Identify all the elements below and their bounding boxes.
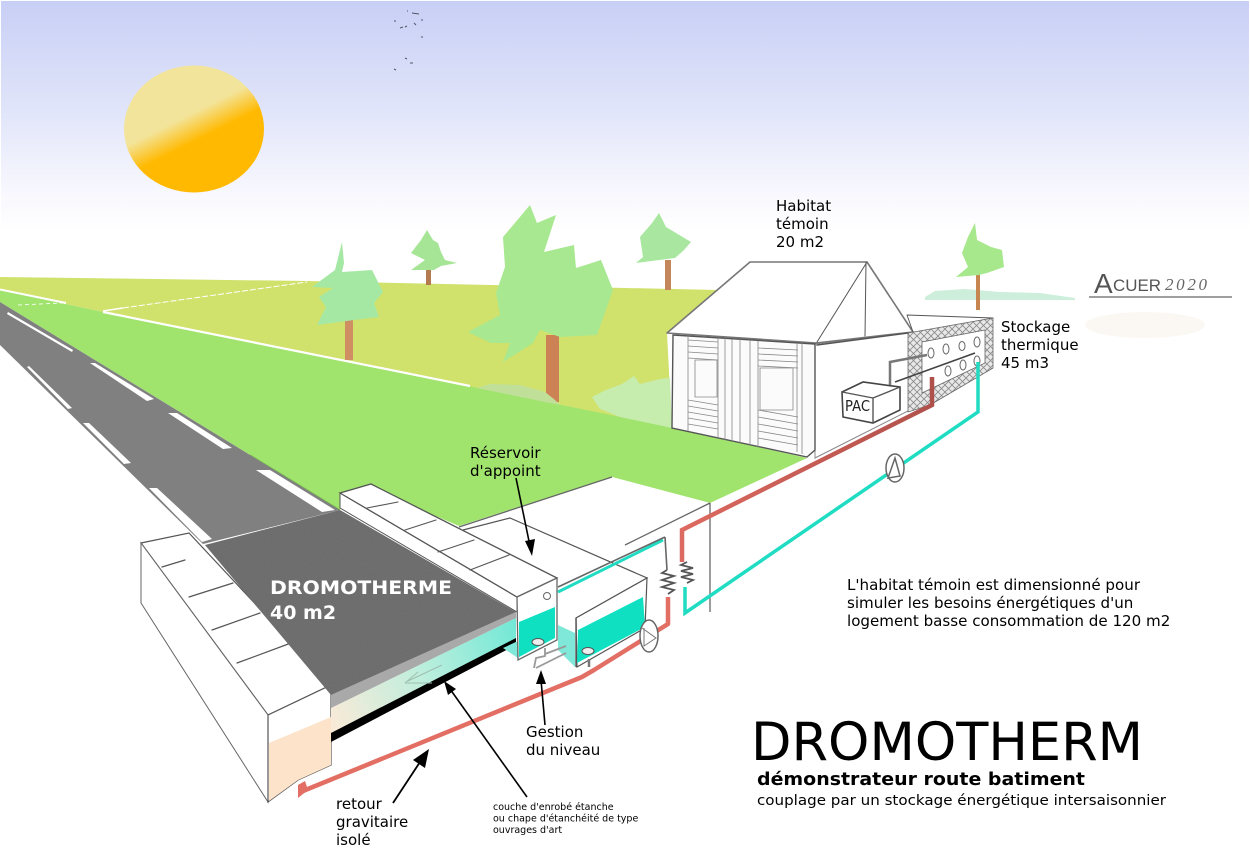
PAC heat pump: PAC [845,397,870,415]
signature [1089,268,1232,299]
label: reservoir: d'appoint [470,462,541,480]
label: waterproof layer: ouvrages d'art [493,825,562,836]
bushes [477,376,672,428]
tree: big tree [468,205,613,402]
water gradient layer [331,618,516,733]
house side wall [815,332,910,458]
heat exchanger coils [662,562,693,594]
sky background [1,1,1249,232]
roof [667,262,913,343]
label: thermal storage: Stockage [1001,318,1070,336]
road [0,302,340,544]
soil patch [1085,312,1205,338]
arrow: gravity return [393,749,429,803]
circulator pump on storage loop [886,454,904,482]
storage tank [817,315,993,412]
arrow: reservoir [516,478,535,556]
horizon tree and bushes [925,223,1075,310]
windows and cladding [688,336,802,454]
grass edge shading [250,455,340,510]
label: gravity return: retour [336,795,382,813]
level control device [534,646,566,668]
subtitle: démonstrateur route batiment [757,770,1085,790]
label: thermal storage: thermique [1001,336,1079,354]
explanatory note: logement basse consommation de 120 m2 [847,612,1170,630]
reservoir front face [517,578,557,660]
sun [124,66,264,192]
label: level control: du niveau [526,741,600,759]
tree: small tree 3 [411,230,457,285]
label: habitat: 20 m2 [776,233,824,251]
flow arrow [405,665,442,683]
dromotherme label: DROMOTHERME [270,577,452,599]
pipe: cold teal line [685,362,978,613]
label: waterproof layer: couche d'enrobé étanche [493,802,614,813]
house [667,262,913,458]
explanatory note: L'habitat témoin est dimensionné pour [847,576,1140,594]
arrow: waterproof layer [444,681,527,797]
road end section layers [331,612,516,742]
tree: tree near house [636,213,691,290]
dromotherme asphalt surface: 40 m2 [270,602,336,624]
road markings [7,312,335,542]
left curb box [141,533,331,802]
PAC heat pump [842,353,975,423]
signature: 2020 [1165,275,1208,294]
left curb front face [268,685,331,802]
right curb box with reservoir [340,484,566,668]
label: gravity return: isolé [336,831,371,849]
near grass verge [0,290,807,526]
signature: CUER [1113,276,1161,295]
house front wall [672,335,815,457]
circulator pump on return [640,620,658,652]
white foundation panel [459,477,710,572]
label: habitat: témoin [776,215,829,233]
label: level control: Gestion [526,723,583,741]
tagline: couplage par un stockage énergétique intersaisonnier [757,793,1166,809]
signature: A [1094,268,1113,299]
label: thermal storage: 45 m3 [1001,354,1049,372]
foundation panel edges [459,477,710,612]
dromotherme asphalt surface [205,510,516,695]
peach soil section [269,717,331,801]
gritty edge [331,612,516,708]
label: gravity return: gravitaire [336,813,408,831]
label: reservoir: Réservoir [470,444,541,462]
arrow: level control [536,670,546,725]
pipe: gravity return [298,597,668,798]
main water tank [463,518,667,667]
label: habitat: Habitat [776,197,831,215]
field boundary lines [0,282,470,386]
main title: DROMOTHERM [751,712,1143,773]
label: waterproof layer: ou chape d'étanchéité de type [493,814,638,824]
tree: slim tree [312,242,383,360]
explanatory note: simuler les besoins énergétiques d'un [847,594,1133,612]
pipe: hot red line [682,377,932,562]
waterproof black layer [331,638,516,742]
birds [394,11,423,70]
reservoir water [519,607,555,657]
far field [0,277,718,428]
teal supply pipe [558,537,667,592]
